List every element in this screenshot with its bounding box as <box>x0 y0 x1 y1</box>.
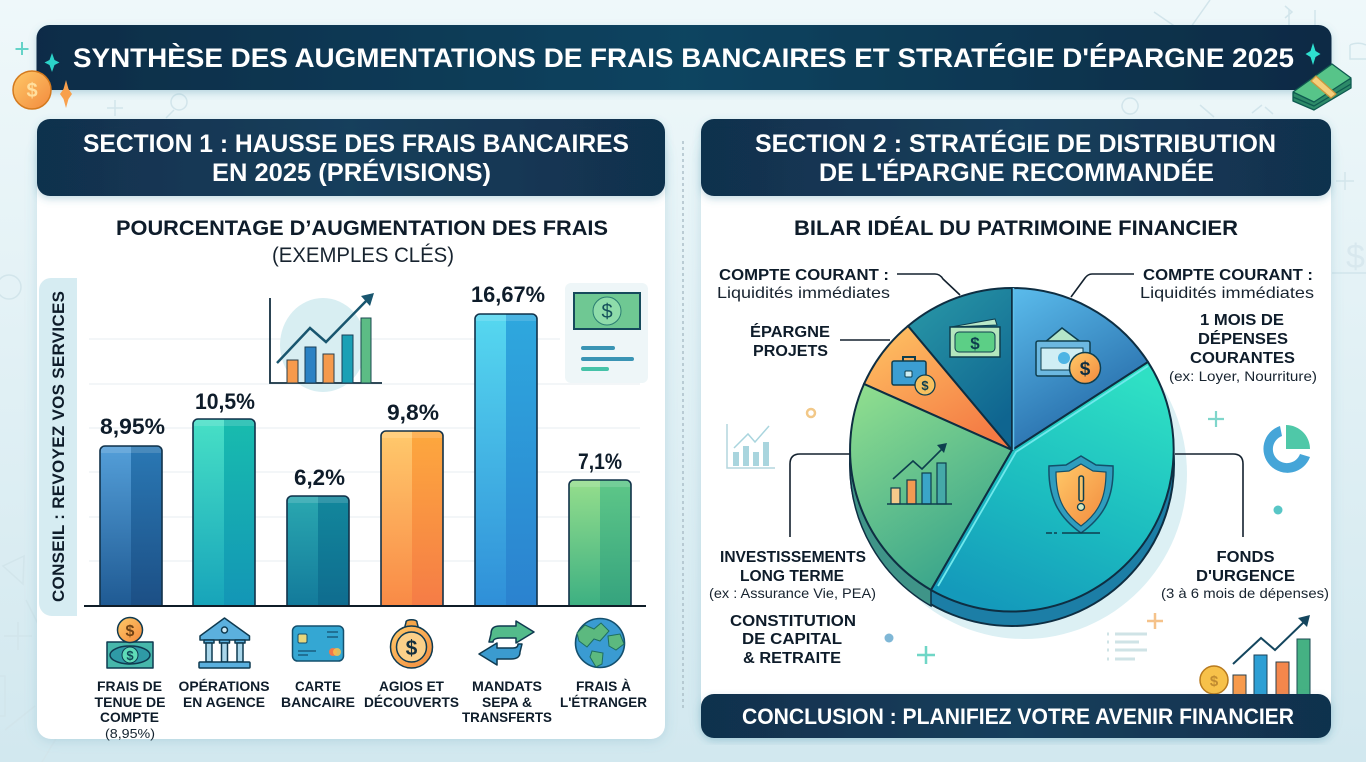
axis labels: FRAIS À <box>576 678 631 694</box>
axis labels: EN AGENCE <box>183 694 265 710</box>
icon: donut chart <box>1263 425 1310 473</box>
bar: agios et découverts <box>381 400 443 606</box>
icon: portefeuille: $ <box>1080 359 1091 380</box>
icon: portefeuille <box>1036 328 1100 384</box>
icon: frais de tenue de compte: $ <box>126 648 134 663</box>
slice: investissements long terme <box>850 384 1012 590</box>
bar: frais à l'étranger <box>569 449 631 606</box>
callout: fonds d'urgence: D'URGENCE <box>1196 568 1295 585</box>
callout: dépenses courantes: (ex: Loyer, Nourriture) <box>1169 368 1317 384</box>
icon: croissance <box>887 443 952 504</box>
axis labels: L'ÉTRANGER <box>560 694 647 710</box>
slice: épargne projets <box>864 326 1012 450</box>
axis labels: SEPA & <box>482 694 532 710</box>
callout: fonds d'urgence <box>1161 454 1329 601</box>
icon: bouclier <box>1046 456 1113 533</box>
panel: section 2 <box>701 119 1331 738</box>
icon: agios et découverts: $ <box>406 637 418 660</box>
callout: investissements long terme: INVESTISSEMENTS <box>720 549 866 566</box>
bar: frais à l'étranger: 7,1% <box>578 449 622 474</box>
callout: fonds d'urgence: (3 à 6 mois de dépenses) <box>1161 585 1329 601</box>
icon: banknote card <box>565 283 648 383</box>
slice: compte courant bleu <box>1012 288 1148 450</box>
icon: frais de tenue de compte <box>107 618 153 668</box>
icon: growth chart <box>270 293 382 392</box>
section 2 header <box>701 119 1331 196</box>
axis labels: OPÉRATIONS <box>178 678 270 694</box>
icon: billet <box>950 319 1000 357</box>
bar: mandats SEPA et transferts: 16,67% <box>471 282 545 307</box>
title banner <box>36 25 1332 90</box>
callout: compte courant gauche: COMPTE COURANT : <box>719 267 889 284</box>
callout: dépenses courantes: DÉPENSES <box>1198 329 1288 348</box>
bar: mandats SEPA et transferts <box>471 282 545 606</box>
icon: sparkle right of title <box>1306 43 1320 65</box>
bar: carte bancaire <box>287 465 349 606</box>
icon: mallette <box>892 357 935 395</box>
icon: bottom right growth: $ <box>1210 673 1219 690</box>
chart heading <box>116 217 608 267</box>
callout: compte courant droite <box>1071 267 1314 302</box>
bar chart <box>84 282 646 606</box>
panel: section 1 <box>37 119 665 741</box>
icon: frais à l'étranger <box>576 618 624 668</box>
icon: mallette: $ <box>921 378 929 393</box>
icon: frais de tenue de compte: $ <box>126 623 135 640</box>
icon: agios et découverts <box>390 620 432 668</box>
axis labels <box>94 678 647 741</box>
icon: gold coin: $ <box>26 80 38 102</box>
bar: opérations en agence: 10,5% <box>195 389 255 414</box>
sidebar tip: CONSEIL : REVOYEZ VOS SERVICES <box>49 291 68 602</box>
bar: frais de tenue de compte <box>100 414 165 606</box>
section 2 header: SECTION 2 : STRATÉGIE DE DISTRIBUTION <box>755 129 1276 158</box>
callout: compte courant gauche: Liquidités immédiates <box>717 285 890 302</box>
conclusion banner <box>701 694 1331 738</box>
callout: compte courant droite: Liquidités immédiates <box>1140 285 1314 302</box>
bar: frais de tenue de compte: 8,95% <box>100 414 165 439</box>
text: $ <box>1346 238 1365 276</box>
callout: investissements long terme: LONG TERME <box>740 568 844 585</box>
chart heading: POURCENTAGE D’AUGMENTATION DES FRAIS <box>116 217 608 240</box>
section 2 header: DE L'ÉPARGNE RECOMMANDÉE <box>819 158 1214 187</box>
pie heading: BILAR IDÉAL DU PATRIMOINE FINANCIER <box>794 217 1238 240</box>
callout: dépenses courantes: 1 MOIS DE <box>1200 312 1284 329</box>
icon: money stack <box>1293 64 1351 110</box>
bar: carte bancaire: 6,2% <box>294 465 345 490</box>
callout: dépenses courantes: COURANTES <box>1190 350 1295 367</box>
conclusion banner: CONCLUSION : PLANIFIEZ VOTRE AVENIR FINANCIER <box>742 704 1294 729</box>
callout: investissements long terme: (ex : Assurance Vie, PEA) <box>709 585 876 601</box>
icon: gold coin <box>13 71 72 109</box>
callout: fonds d'urgence: FONDS <box>1216 549 1275 566</box>
axis labels: DÉCOUVERTS <box>364 694 459 710</box>
axis labels: AGIOS ET <box>379 678 444 694</box>
callout: investissements long terme <box>709 454 876 667</box>
axis labels: CARTE <box>295 678 341 694</box>
axis labels: TENUE DE <box>94 694 166 710</box>
axis labels: BANCAIRE <box>281 694 355 710</box>
pie chart <box>850 288 1187 639</box>
callout: épargne projets <box>750 322 890 360</box>
slice: compte courant sarcelle <box>908 288 1012 450</box>
icon: carte bancaire <box>292 626 344 661</box>
icon: banknote card: $ <box>601 301 613 323</box>
bar: agios et découverts: 9,8% <box>387 400 439 425</box>
section 1 header <box>37 119 665 196</box>
icon: mandats SEPA et transferts <box>479 621 534 665</box>
title banner: SYNTHÈSE DES AUGMENTATIONS DE FRAIS BANCAIRES ET STRATÉGIE D'ÉPARGNE 2025 <box>73 42 1294 73</box>
axis labels: TRANSFERTS <box>462 709 552 725</box>
axis labels: (8,95%) <box>105 726 155 741</box>
callout: épargne projets: PROJETS <box>753 343 828 360</box>
axis labels: COMPTE <box>100 709 159 725</box>
callout: investissements long terme: CONSTITUTION <box>730 613 856 630</box>
callout: dépenses courantes <box>1169 312 1317 384</box>
section 1 header: EN 2025 (PRÉVISIONS) <box>212 158 491 187</box>
callout: compte courant droite: COMPTE COURANT : <box>1143 267 1313 284</box>
axis labels: FRAIS DE <box>97 678 162 694</box>
slice: fonds d'urgence <box>931 362 1174 612</box>
callout: épargne projets: ÉPARGNE <box>750 322 830 341</box>
callout: investissements long terme: DE CAPITAL <box>742 631 842 648</box>
section 1 header: SECTION 1 : HAUSSE DES FRAIS BANCAIRES <box>83 130 629 158</box>
bar: opérations en agence <box>193 389 255 606</box>
icon: opérations en agence <box>199 618 250 668</box>
icon: billet: $ <box>970 334 980 353</box>
decorative side icons <box>727 409 1282 664</box>
icon: sparkles left of title <box>16 42 60 72</box>
icon: bottom right growth <box>1200 615 1310 695</box>
axis labels: MANDATS <box>472 678 542 694</box>
callout: investissements long terme: & RETRAITE <box>743 650 841 667</box>
sidebar tip <box>39 278 77 616</box>
chart heading: (EXEMPLES CLÉS) <box>272 244 454 267</box>
callout: compte courant gauche <box>717 267 960 302</box>
